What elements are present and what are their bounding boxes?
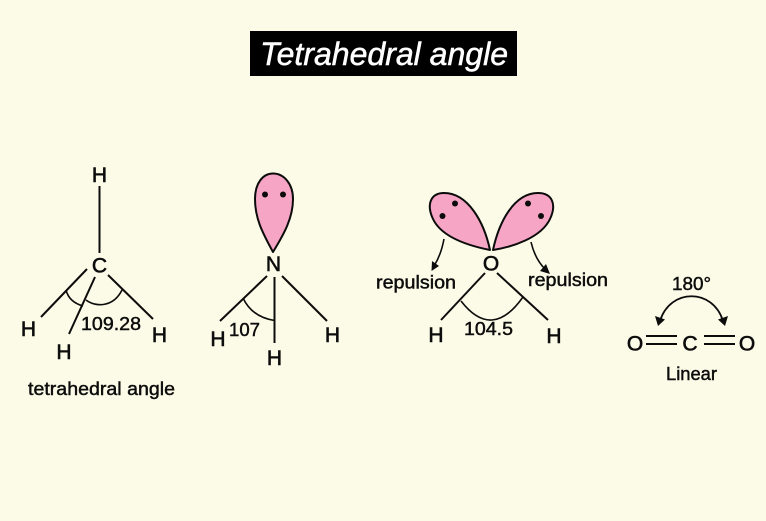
atoms: ammonia: H <box>210 328 226 351</box>
bonds: water <box>441 273 548 320</box>
lone pair lobe: ammonia <box>255 174 293 252</box>
atoms: linear: C <box>682 332 698 356</box>
angle label: 109.28: 109.28 <box>81 313 141 334</box>
diagram: ammonia <box>210 174 340 370</box>
atoms: methane: H <box>56 341 72 364</box>
atoms: methane: C <box>92 254 107 278</box>
diagram: water <box>376 193 608 348</box>
bonds: ammonia <box>220 276 327 343</box>
label: left repulsion: repulsion <box>376 272 456 292</box>
atoms: linear: O <box>627 332 643 356</box>
bonds: methane <box>41 186 153 334</box>
diagram: methane tetrahedral <box>21 164 167 364</box>
label: right repulsion: repulsion <box>528 269 608 290</box>
title: Tetrahedral angle <box>260 36 508 72</box>
double-headed arc arrow <box>655 296 728 326</box>
angle label: 180 degrees: 180° <box>672 273 711 294</box>
angle arc: ammonia <box>243 298 274 320</box>
diagram: linear carbon dioxide <box>627 273 755 384</box>
atoms: water: H <box>546 325 562 348</box>
atoms: ammonia: H <box>267 347 282 370</box>
angle label: 107: 107 <box>229 319 260 340</box>
lone pair lobes: water <box>430 193 553 250</box>
arrow: right repulsion <box>531 242 550 274</box>
angle arcs: methane <box>66 290 122 306</box>
atoms: linear: O <box>739 332 755 356</box>
atoms: linear <box>627 332 755 356</box>
caption: tetrahedral angle: tetrahedral angle <box>28 378 175 399</box>
atoms: water: H <box>428 324 444 347</box>
atoms: methane <box>21 164 167 364</box>
angle arc: water <box>461 297 523 320</box>
atoms: ammonia <box>210 253 340 370</box>
atoms: water <box>428 252 562 348</box>
atoms: water: O <box>483 252 499 276</box>
angle label: 104.5: 104.5 <box>464 318 513 339</box>
atoms: ammonia: H <box>325 324 340 347</box>
arrow: left repulsion <box>432 239 444 271</box>
atoms: ammonia: N <box>266 253 281 276</box>
caption: Linear: Linear <box>666 363 717 384</box>
atoms: methane: H <box>21 318 36 341</box>
double bonds <box>646 336 735 344</box>
atoms: methane: H <box>92 164 107 187</box>
atoms: methane: H <box>152 324 167 347</box>
